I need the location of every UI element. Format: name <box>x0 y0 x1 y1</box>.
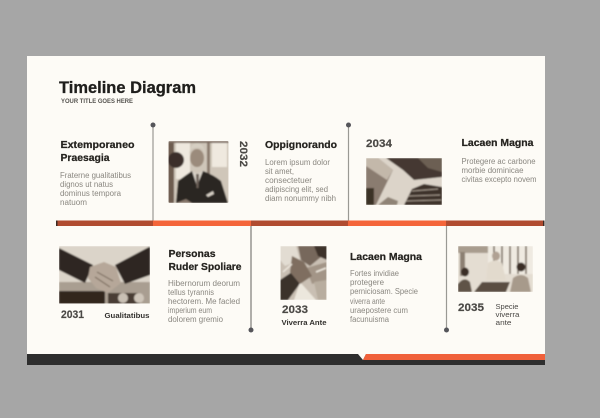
connector: bottom left <box>248 226 254 332</box>
item 2031 body <box>168 279 240 324</box>
label 2031: Gualitatibus <box>104 311 150 320</box>
item 2031 heading: Personas <box>168 248 216 260</box>
label 2033: Viverra Ante <box>282 318 326 327</box>
title: Timeline Diagram <box>59 78 196 97</box>
connector: top right <box>346 122 351 220</box>
item 2030 body: natuom <box>60 198 87 207</box>
label 2035: Specie <box>496 302 518 311</box>
item 2033 body <box>350 269 418 324</box>
connector: bottom right <box>444 226 449 332</box>
year 2033: 2033 <box>282 304 308 316</box>
item 2031 body: imperium eum <box>168 306 212 315</box>
item 2030 heading: Extemporaneo <box>60 139 134 151</box>
item 2033 body: viverra ante <box>350 297 385 306</box>
item 2030 body: dignos ut natus <box>60 180 113 189</box>
item 2034 body <box>462 157 536 184</box>
timeline bar <box>56 220 544 226</box>
item 2033 body: facunuisma <box>350 315 390 324</box>
item 2030 body: Fraterne gualitatibus <box>60 171 131 180</box>
item 2031 body: hectorem. Me facled <box>168 297 240 306</box>
footer band <box>27 354 545 365</box>
year 2035: 2035 <box>458 302 484 314</box>
item 2034 body: morbie dominicae <box>462 166 524 175</box>
photo: skyscrapers <box>366 158 442 205</box>
item 2033 body: protegere <box>350 278 384 287</box>
subtitle: YOUR TITLE GOES HERE <box>61 99 133 105</box>
item 2030 heading line 2: Praesagia <box>60 152 110 164</box>
year 2032: 2032 <box>237 141 249 167</box>
year 2031: 2031 <box>61 309 84 321</box>
item 2033 body: perniciosam. Specie <box>350 287 418 296</box>
year 2034: 2034 <box>366 138 393 150</box>
photo: office meeting <box>458 246 533 292</box>
item 2030 body: dominus tempora <box>60 189 122 198</box>
item 2031 body: dolorem gremio <box>168 315 224 324</box>
item 2032 body: diam nonummy nibh <box>265 194 336 203</box>
item 2033 heading: Lacaen Magna <box>350 251 422 263</box>
label 2035: viverra <box>496 310 520 319</box>
item 2032 body: sit amet, <box>265 167 294 176</box>
photo: handshake <box>59 246 150 304</box>
item 2032 body: adipiscing elit, sed <box>265 185 328 194</box>
item 2032 heading: Oppignorando <box>265 139 337 151</box>
item 2031 heading line 2: Ruder Spoliare <box>168 261 242 273</box>
photo: businessman <box>168 141 229 203</box>
item 2030 body <box>60 171 131 207</box>
item 2034 heading: Lacaen Magna <box>462 137 534 149</box>
connector: top left <box>150 122 156 220</box>
item 2034 body: civitas excepto novem <box>462 175 536 184</box>
item 2032 body <box>265 158 336 203</box>
photo: team hands <box>280 246 327 300</box>
item 2033 body: Fortes invidiae <box>350 269 399 278</box>
item 2031 body: Hibernorum deorum <box>168 279 240 288</box>
item 2033 body: uraepostere cum <box>350 306 408 315</box>
label 2035 <box>496 302 520 327</box>
item 2032 body: Lorem ipsum dolor <box>265 158 330 167</box>
panel: card <box>27 56 545 365</box>
item 2031 body: tellus tyrannis <box>168 288 214 297</box>
item 2034 body: Protegere ac carbone <box>462 157 536 166</box>
item 2032 body: consectetuer <box>265 176 312 185</box>
label 2035: ante <box>496 318 512 327</box>
